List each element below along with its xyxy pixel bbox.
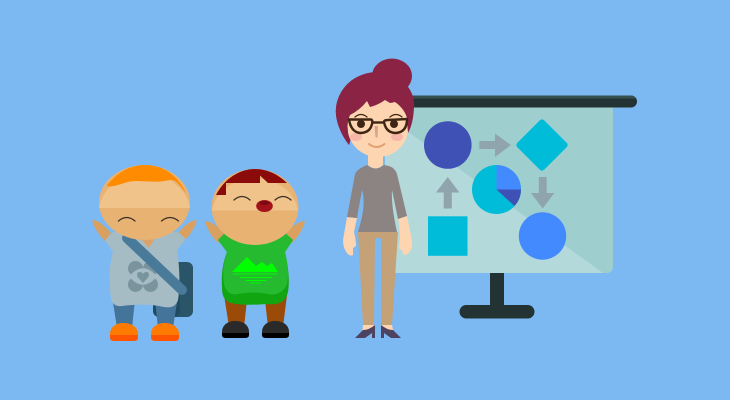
sweater with sleeves <box>347 165 407 232</box>
arrow right <box>479 134 511 157</box>
screen stand <box>460 270 534 318</box>
hair bun <box>372 58 412 94</box>
character: boy with orange hair <box>92 165 197 341</box>
shoes <box>355 325 401 338</box>
glasses and eyes <box>349 114 407 133</box>
feet <box>362 325 394 334</box>
neck <box>368 150 383 168</box>
cyan square <box>428 216 468 256</box>
hair back <box>336 72 414 145</box>
smile <box>369 144 384 147</box>
arrow down <box>531 177 554 208</box>
bright blue circle <box>519 212 566 260</box>
screen panel <box>385 104 613 273</box>
dark blue circle <box>424 121 472 169</box>
shoes <box>222 321 289 338</box>
cyan diamond <box>515 118 569 172</box>
character: boy in green shirt <box>205 169 305 338</box>
open mouth <box>256 200 273 212</box>
hands and forearms <box>343 216 412 256</box>
cheeks <box>350 133 403 141</box>
projector screen with diagrams <box>385 96 637 318</box>
legs <box>112 296 178 328</box>
shirt logo <box>128 261 158 292</box>
arms <box>205 221 305 243</box>
nose <box>374 126 378 138</box>
shoulder bag <box>153 262 193 317</box>
head <box>99 165 190 240</box>
character: woman presenter <box>336 58 414 338</box>
shirt logo: mountains <box>232 257 278 284</box>
shirt <box>218 232 293 305</box>
arrow up <box>436 177 459 208</box>
smiling eyes <box>118 218 178 221</box>
smiling eyes <box>234 196 291 200</box>
face <box>348 97 408 157</box>
bag strap <box>127 238 182 290</box>
legs <box>224 295 287 327</box>
shoes <box>110 323 179 341</box>
shirt <box>105 232 186 307</box>
trousers <box>358 232 398 325</box>
arms <box>92 220 197 241</box>
head <box>212 169 298 245</box>
screen top bar <box>405 96 637 108</box>
neck <box>140 238 155 248</box>
pie chart <box>472 165 521 214</box>
hair fringe <box>336 72 414 145</box>
